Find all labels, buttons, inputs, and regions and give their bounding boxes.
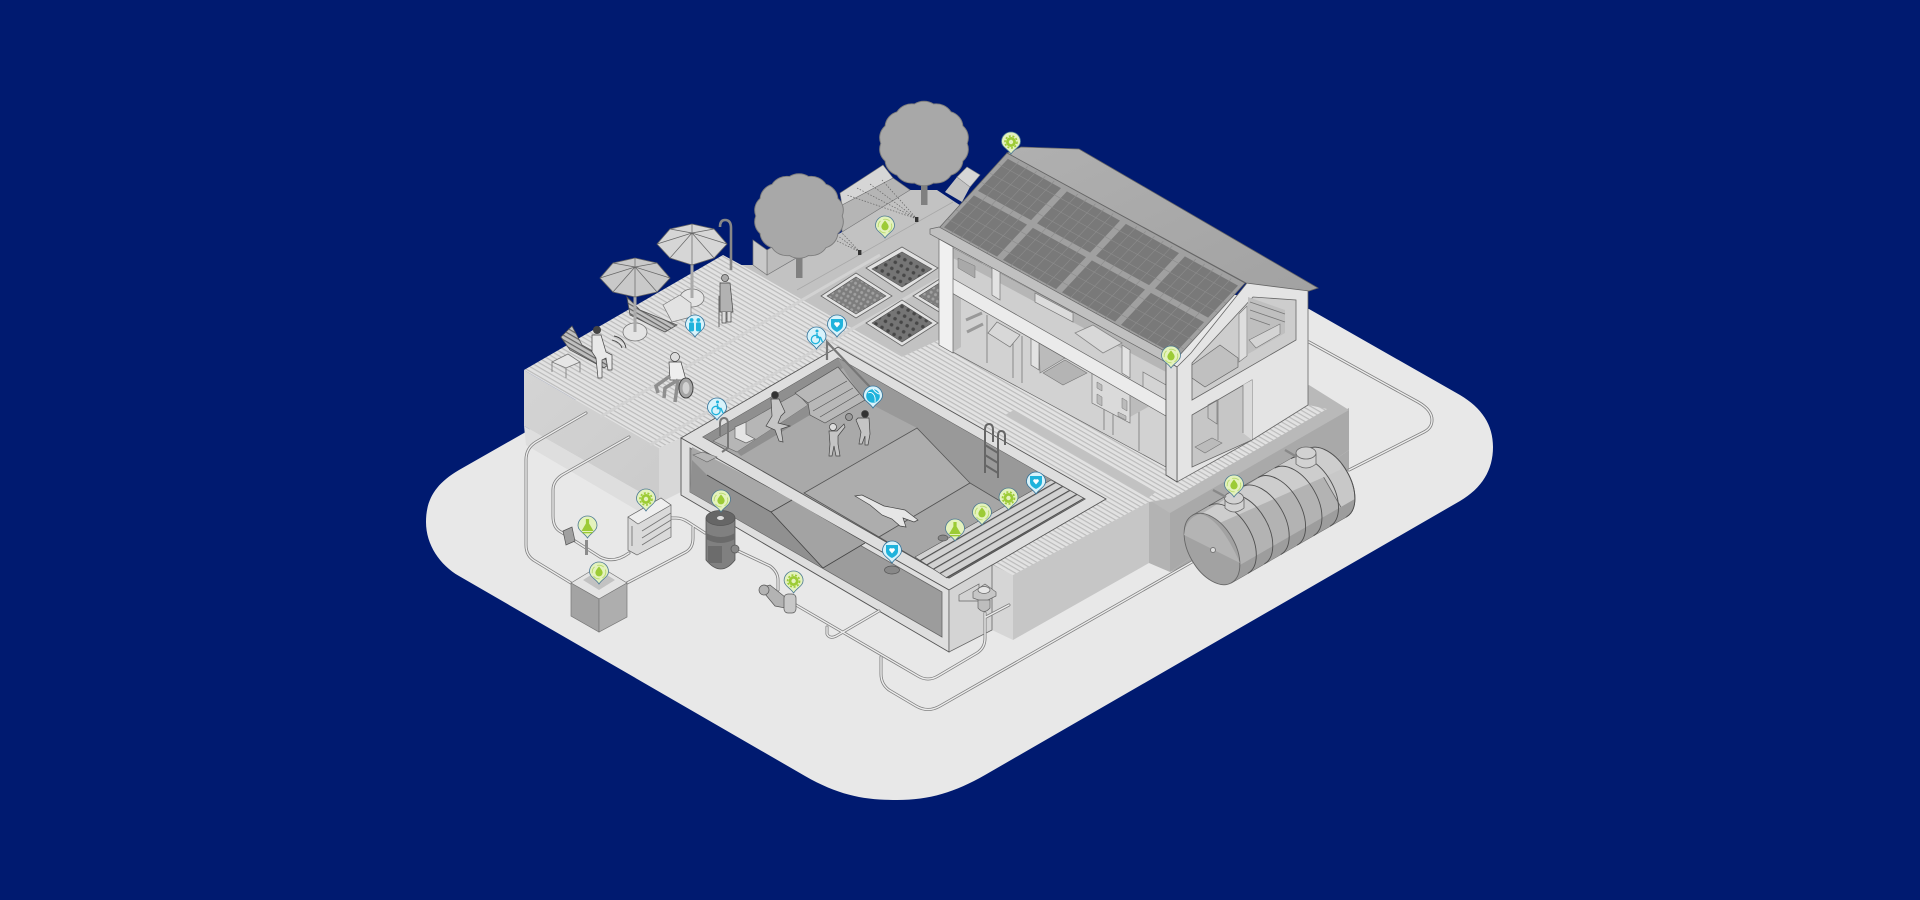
house long beam xyxy=(952,278,1166,416)
terrace block side faces xyxy=(524,370,1349,640)
children with ball xyxy=(829,410,870,456)
woman sitting on pool bench xyxy=(766,392,790,442)
pin: drain safety xyxy=(882,541,902,563)
umbrella back xyxy=(657,224,727,307)
pin: pump xyxy=(784,571,803,593)
swimmer xyxy=(855,495,918,527)
pin: irrigation xyxy=(876,216,894,238)
pin: accessible steps xyxy=(807,327,826,349)
pool ladder left xyxy=(720,418,728,452)
pin: solar energy xyxy=(1002,132,1020,154)
pool handrail xyxy=(827,342,870,387)
heat pump xyxy=(628,498,671,555)
old man with towel and cane xyxy=(719,274,733,327)
pin: restrooms xyxy=(686,315,704,337)
roof back slope xyxy=(1007,147,1318,291)
floor drains xyxy=(884,535,948,574)
circulation pump xyxy=(759,585,796,613)
rainwater tank xyxy=(1184,446,1356,586)
skimmer box xyxy=(959,584,996,612)
pool front cutaway wall xyxy=(681,438,992,652)
pin: safety cover xyxy=(1026,472,1046,494)
pool chair lift xyxy=(735,422,755,443)
control box xyxy=(563,527,588,555)
lounger with seated man xyxy=(552,326,626,378)
pin: energy xyxy=(999,488,1018,510)
pool rim xyxy=(681,347,1106,590)
tank pipes and service lines xyxy=(526,342,1432,710)
pin: accessible lift xyxy=(708,398,726,420)
pin: water storage xyxy=(590,562,608,584)
lounger back xyxy=(627,295,691,332)
pin: handrail safety xyxy=(828,315,846,337)
illustration: isometric pool and house site xyxy=(426,100,1493,800)
pin: rainwater tank xyxy=(1224,475,1244,497)
sand filter xyxy=(706,510,739,569)
house xyxy=(930,147,1318,482)
water storage box xyxy=(571,566,627,632)
tree left xyxy=(755,174,843,278)
tank service domes xyxy=(1224,447,1316,512)
tree right xyxy=(880,101,968,205)
person in wheelchair xyxy=(656,352,693,402)
pin: water chemistry xyxy=(946,519,964,541)
pin: recreation xyxy=(864,386,882,408)
pin: heat pump xyxy=(636,489,656,511)
terrace deck xyxy=(524,255,1349,590)
house left column xyxy=(939,239,953,353)
pool steps xyxy=(795,367,865,423)
house upper floor interior xyxy=(953,248,1166,402)
pool basin xyxy=(703,358,1085,578)
pin: water reuse xyxy=(972,503,992,525)
garden behind terrace xyxy=(740,165,1000,357)
house ground floor interior xyxy=(953,293,1166,467)
shower xyxy=(720,220,731,270)
umbrella front xyxy=(600,258,670,341)
house corner post xyxy=(1166,360,1177,482)
pin: chemical dosing xyxy=(578,516,597,538)
pin: filter xyxy=(712,490,730,512)
sprinklers xyxy=(835,180,918,255)
gable lower window xyxy=(1192,380,1252,467)
pool deck hatching xyxy=(915,480,1085,578)
roof eave xyxy=(930,227,1177,366)
plant beds xyxy=(821,247,985,346)
pool ladder right xyxy=(985,424,1005,478)
ground plot xyxy=(426,250,1493,800)
gable upper window xyxy=(1192,297,1296,400)
house gable wall xyxy=(1177,283,1308,482)
solar roof xyxy=(939,153,1245,358)
pool xyxy=(681,342,1106,652)
pin: house water xyxy=(1162,346,1180,368)
